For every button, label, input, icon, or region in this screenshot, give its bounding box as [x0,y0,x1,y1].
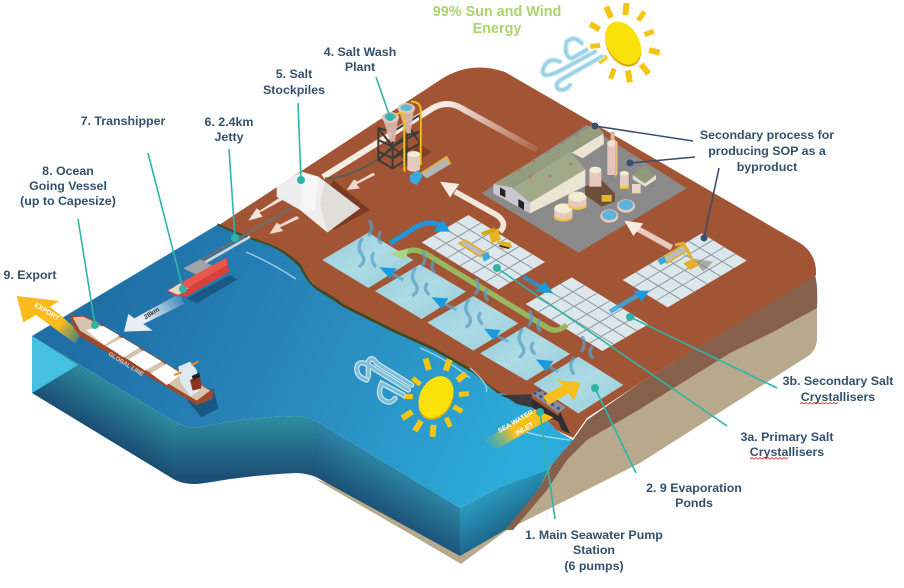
truck and excavator on second crystalliser [657,243,713,272]
icon: top sun [589,3,660,83]
hull [70,315,213,405]
yellow pipes [395,102,421,172]
plant slab [482,125,687,253]
transhipper shadow [187,275,237,303]
hatches [86,326,119,345]
blue arrow between crystallisers [523,277,553,293]
blue arrow to primary crystalliser [390,220,450,243]
label 2: 2. 9 Evaporation [646,481,742,495]
pond gold inlet arrow [543,380,581,405]
stockpile conveyor [325,150,392,178]
label 3b: Crystallisers [801,390,875,404]
label 3a: 3a. Primary Salt [741,430,833,444]
arrow to plant slab [624,221,672,248]
silos [382,103,415,142]
secondary SOP processing plant [482,123,687,253]
salt wash plant and stockpile [248,102,451,234]
panel: isometric site block [32,68,817,564]
ocean going vessel [70,315,213,405]
label 4: Plant [345,60,375,74]
leader 4 [376,77,390,117]
second secondary crystalliser grid [623,233,747,307]
leader 7 [148,153,183,289]
leader 3a [497,268,727,426]
processing pipe to secondary plant [323,104,537,177]
pond 1 [322,233,413,288]
icon: lower sun [400,358,469,437]
sea surface [32,225,573,508]
label 3b [783,374,893,404]
blue pond arrows [379,267,558,372]
deck [73,317,210,401]
stockpile shadow [322,180,370,230]
label 8: 8. Ocean [42,164,94,178]
tan rock strata [315,295,817,564]
wash plant shadow [400,143,432,168]
evaporation wisps [359,222,592,373]
label 2: Ponds [675,496,713,510]
sea front face [32,336,548,556]
salt stockpile [277,172,360,232]
truck [410,157,451,185]
leader 5 [298,103,301,180]
primary crystalliser grid [422,215,545,289]
jetty [183,209,291,275]
leader 1 [540,412,555,519]
icon: lower wind [357,359,412,402]
pump station wall [500,394,532,407]
label 3b: 3b. Secondary Salt [783,374,893,388]
secondary crystalliser grid [526,277,648,351]
transhipper [167,257,229,297]
leader 8 [78,219,95,325]
marine assets [17,209,291,417]
pump dots [535,391,558,408]
label 8: Going Vessel [29,179,107,193]
stockpile arrows [248,173,375,234]
label 1: 1. Main Seawater Pump [525,528,663,542]
inlet text line 2: INLET [515,421,536,437]
wash plant tank [407,151,420,172]
heading: energy: 99% Sun and Wind [433,4,561,20]
green brine return [389,248,567,330]
heading: energy: Energy [473,21,521,37]
SOP leaders [592,122,719,242]
main building [493,123,604,213]
pond 5 [533,357,623,413]
evaporation ponds [322,215,747,413]
label secondary process: producing SOP as a [708,144,826,158]
truck on primary crystalliser [459,240,490,262]
bridge [174,362,201,397]
surf lines [246,252,570,440]
pond 3 [427,296,518,351]
label 3a: Crystallisers [750,445,824,459]
label 9: 9. Export [3,268,57,282]
ocean vessel shadow [187,388,218,417]
label 1: (6 pumps) [564,559,624,573]
shoreline [217,225,500,394]
label 3a [741,430,833,459]
storage tanks [554,192,586,221]
blue arrow to second crystalliser [610,291,649,312]
label secondary process: Secondary process for [700,128,834,142]
salt flow arrows [440,182,672,248]
land cut side [503,275,817,530]
label 4: 4. Salt Wash [324,45,396,59]
seawater inlet and pump station [484,380,581,449]
process tower and small tanks [585,132,641,207]
clarifiers [600,199,635,223]
arrow to salt wash plant [440,182,503,232]
label 7: 7. Transhipper [81,114,166,128]
export arrow [17,296,82,343]
excavator on primary crystalliser [482,228,512,249]
hull name: GLOBAL LINE [107,352,144,378]
leader 2 [595,388,636,473]
label secondary process: byproduct [737,160,797,174]
label 6: 6. 2.4km [205,115,253,129]
28km arrow [124,293,184,332]
pump station deck [532,390,566,413]
leader 3b [630,317,777,388]
inlet text: SEA WATER [497,409,535,435]
label 1: Station [573,543,615,557]
green shed [633,166,656,187]
teal leader dots [91,113,634,416]
pond 4 [480,327,570,381]
label 5: 5. Salt [276,67,312,81]
icon: top wind [543,39,602,90]
pump station front [532,398,575,436]
land top surface [216,68,816,438]
leader 6 [229,149,235,238]
export text: EXPORT [33,302,61,323]
wash plant steel frame [378,115,420,168]
28km text: 28km [143,306,161,321]
label 5: Stockpiles [263,83,325,97]
leader lines [78,77,777,519]
label 6: Jetty [215,130,244,144]
label 8: (up to Capesize) [20,194,116,208]
pond 2 [375,264,466,319]
